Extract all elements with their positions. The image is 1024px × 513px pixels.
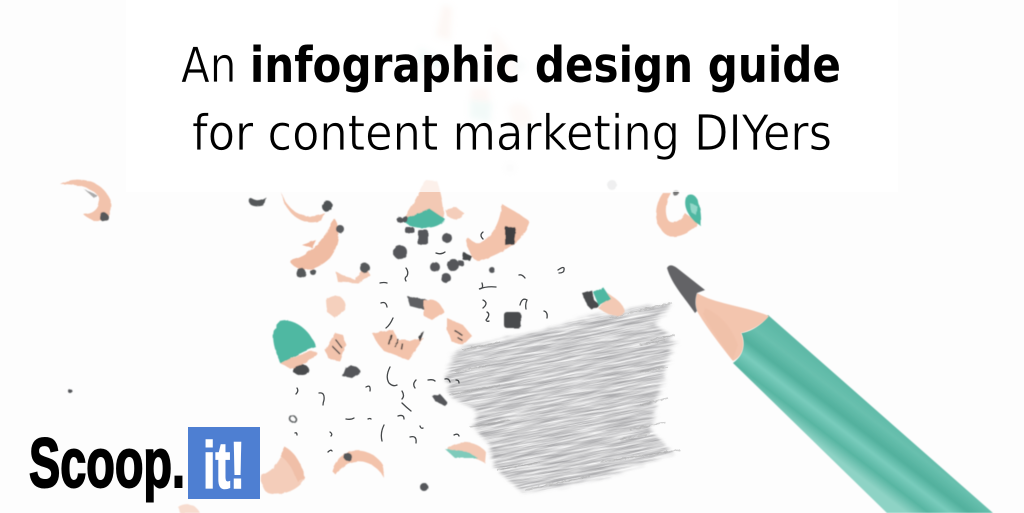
shaving: top left curls	[249, 192, 344, 278]
shaving: top right ring	[656, 190, 701, 237]
shaving: teal cone	[402, 180, 465, 228]
title panel	[126, 0, 898, 192]
wood and teal shavings	[60, 180, 701, 513]
title line 1: An infographic design guide	[181, 37, 841, 94]
shaving: teal blob	[273, 296, 346, 375]
scribble stray strokes	[450, 303, 680, 490]
shaving: left curl	[60, 180, 111, 222]
logo: Scoop.it	[29, 424, 260, 502]
pencil wood tip	[696, 293, 769, 361]
pencil lead	[667, 265, 705, 313]
shaving: big curl	[462, 204, 530, 261]
pencil body	[733, 315, 993, 513]
logo blue badge	[188, 427, 260, 499]
graphite scribble	[409, 260, 709, 513]
title	[181, 37, 841, 162]
shaving: bottom pieces	[178, 442, 486, 513]
logo badge text: it!	[203, 428, 245, 502]
pencil	[667, 265, 993, 513]
title line 2: for content marketing DIYers	[192, 105, 832, 162]
scribble shaded mass	[409, 260, 709, 513]
graphite squiggles	[295, 232, 564, 452]
faded shavings behind title	[418, 4, 532, 171]
shaving: mid pieces	[336, 263, 472, 360]
logo wordmark: Scoop.	[29, 424, 185, 502]
graphite crumbs	[68, 180, 617, 491]
shaving: teal near scribble	[582, 287, 624, 316]
